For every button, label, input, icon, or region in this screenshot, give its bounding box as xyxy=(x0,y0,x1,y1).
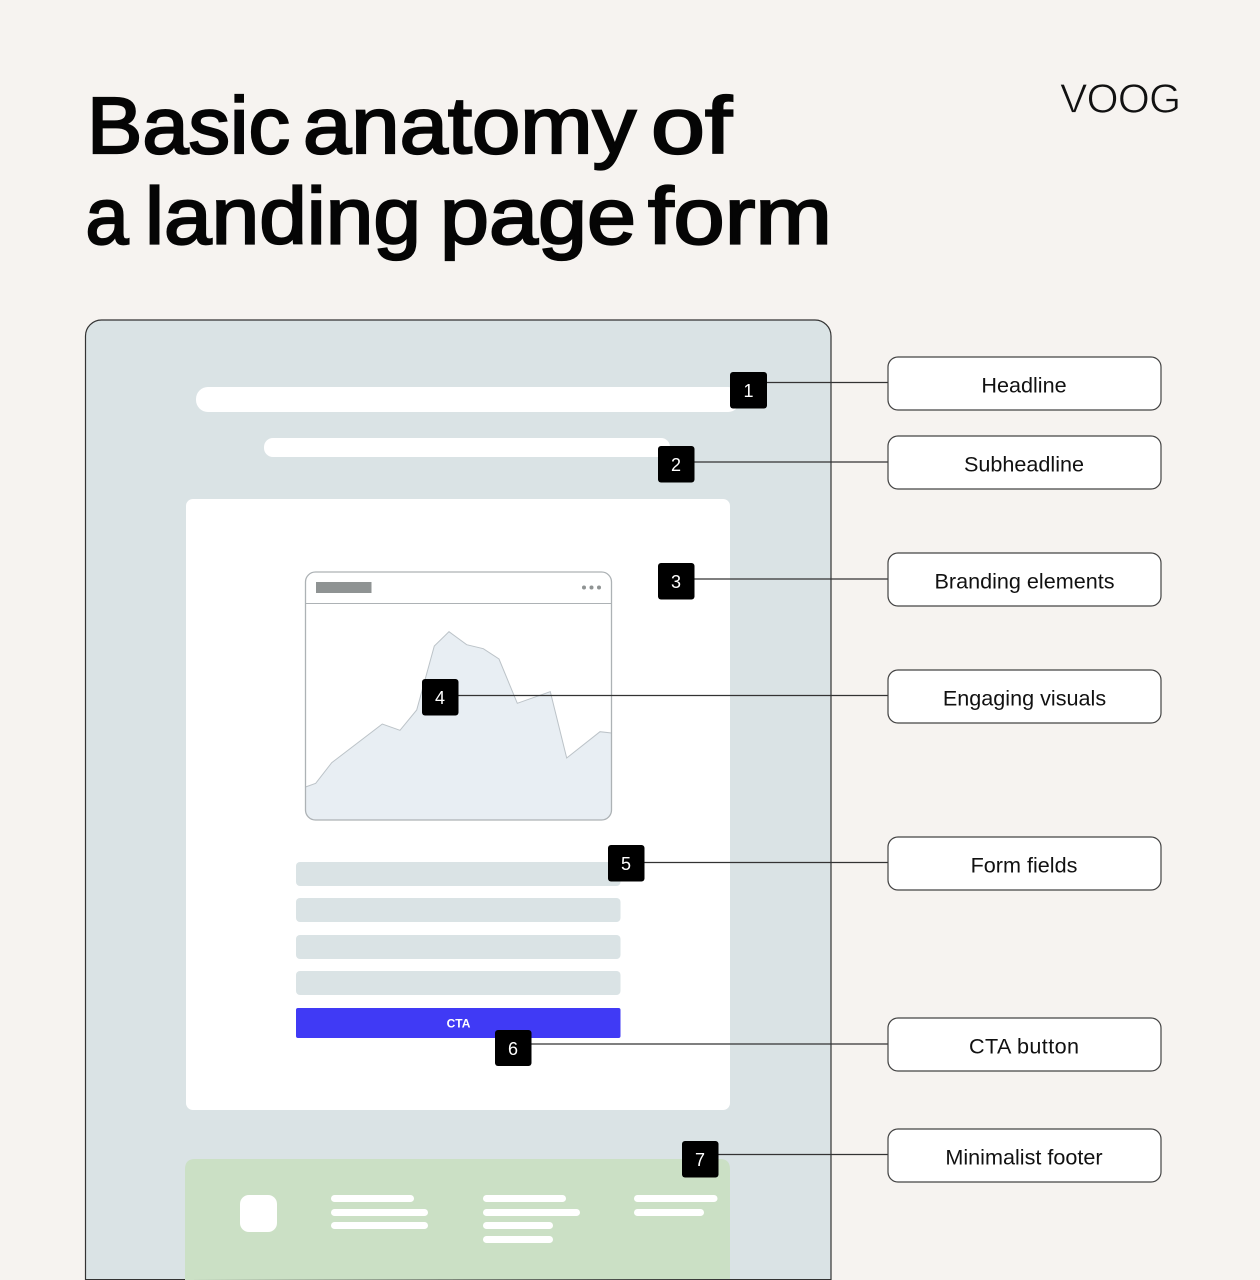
callout 7: Minimalist footer: Minimalist footer xyxy=(945,1144,1103,1170)
footer column 2 xyxy=(483,1195,580,1243)
browser window with area chart xyxy=(306,572,612,820)
callout 7: Minimalist footer: 7 xyxy=(695,1150,705,1170)
CTA button: CTA xyxy=(447,1016,471,1030)
title: anatomy xyxy=(303,81,636,170)
callout 5: Form fields xyxy=(608,837,1161,890)
callout 6: CTA button xyxy=(495,1018,1161,1071)
title: landing xyxy=(145,172,421,260)
subheadline bar xyxy=(264,438,670,457)
form fields xyxy=(296,862,620,995)
callout 4: Engaging visuals: Engaging visuals xyxy=(943,686,1106,710)
callout 2: Subheadline xyxy=(658,436,1161,489)
callout 4: Engaging visuals: 4 xyxy=(435,688,445,708)
title: of xyxy=(651,81,733,170)
title: a xyxy=(86,172,129,260)
panel: footer xyxy=(185,1159,730,1280)
title xyxy=(86,81,832,260)
callout 1: Headline xyxy=(730,357,1161,410)
callout 2: Subheadline: Subheadline xyxy=(964,452,1084,476)
title: page xyxy=(440,172,636,260)
title: Basic xyxy=(87,81,290,170)
footer logo placeholder xyxy=(240,1195,277,1232)
callout 3: Branding elements: Branding elements xyxy=(934,568,1115,594)
CTA button xyxy=(296,1008,620,1038)
title: form xyxy=(648,172,832,260)
footer column 1 xyxy=(331,1195,428,1229)
callout 5: Form fields: 5 xyxy=(621,854,631,874)
callout 3: Branding elements: 3 xyxy=(671,572,681,592)
footer column 3 xyxy=(634,1195,718,1216)
callout 4: Engaging visuals xyxy=(422,670,1161,723)
callout 3: Branding elements xyxy=(658,553,1161,606)
callout 1: Headline: 1 xyxy=(743,381,754,401)
headline bar xyxy=(196,387,740,412)
callout 1: Headline: Headline xyxy=(981,372,1067,398)
callout 6: CTA button: CTA button xyxy=(969,1034,1079,1058)
logo: VOOG: VOOG xyxy=(1060,76,1181,122)
callout 7: Minimalist footer xyxy=(682,1129,1161,1182)
callout 6: CTA button: 6 xyxy=(508,1039,518,1059)
callout 5: Form fields: Form fields xyxy=(971,852,1078,878)
panel: form card xyxy=(186,499,730,1110)
callout 2: Subheadline: 2 xyxy=(671,455,681,475)
panel: landing page mockup xyxy=(85,320,831,1280)
